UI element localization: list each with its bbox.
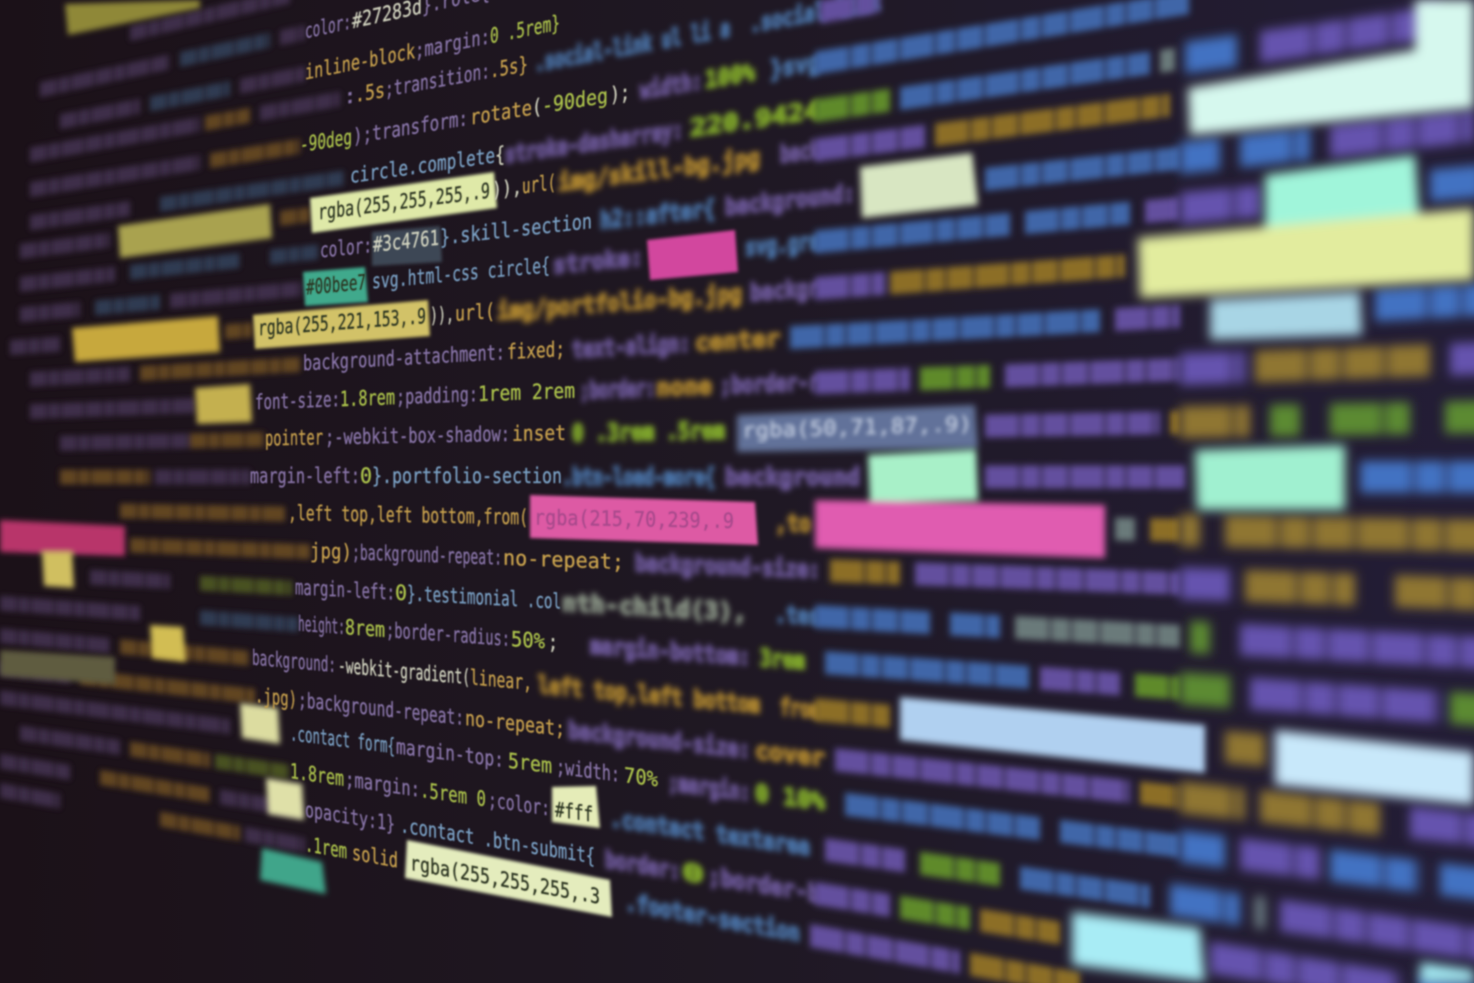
code line: color 27283d: color: <box>305 10 351 44</box>
code line: background repeat: ;background-repeat: <box>352 540 502 570</box>
code line: height and border radius: 50% <box>511 626 545 654</box>
code line: margin and colour: ;margin: <box>345 766 420 802</box>
highlight: yellow left <box>72 316 220 362</box>
highlight: cyan corner <box>1420 962 1474 983</box>
blurred text: load more: .btn-load-more{ <box>562 463 715 491</box>
blurred text: background size lower: background-size: <box>568 716 750 764</box>
blurred text: after selector <box>600 179 855 235</box>
highlight: top left yellow <box>65 0 200 35</box>
code line: transition <box>343 51 528 109</box>
code line: margin and colour: .5rem 0 <box>420 777 486 811</box>
code line: inline-block <box>305 10 560 85</box>
blurred text: width 100: 100% <box>705 58 755 94</box>
code line: testimonial <box>295 574 561 614</box>
blurred text: margin bottom: 3rem <box>760 644 805 675</box>
code line: solid rgba: solid <box>352 840 398 873</box>
highlight: mint right <box>1195 445 1345 510</box>
code line: background repeat lower <box>255 682 565 741</box>
code line: portfolio section: 0 <box>360 464 372 488</box>
highlight: teal lower <box>260 848 326 894</box>
highlight: blue white right <box>1275 730 1474 805</box>
code line: inline-block: inline-block <box>305 38 415 85</box>
code line: rgba white with url: )), <box>492 174 522 202</box>
code line: webkit gradient <box>252 645 532 695</box>
blurred text: width 100: width: <box>640 67 702 105</box>
blurred text: text align: text-align: <box>572 329 690 364</box>
code line: contact form: margin-top: <box>396 734 504 772</box>
code line: background repeat lower: no-repeat; <box>465 705 565 741</box>
far-right strongly defocused code lines <box>1170 21 1474 983</box>
highlight: white mint <box>1188 0 1474 135</box>
code line: contact button: .contact .btn-submit{ <box>400 812 595 869</box>
code line: transition: ;transition: <box>385 58 490 102</box>
blurred text: skill bg image: back <box>780 136 820 169</box>
code line: svg html css: svg.html-css circle{ <box>372 252 550 294</box>
code line: background repeat: no-repeat; <box>503 546 624 574</box>
blurred text: border: ;border-b <box>708 862 820 908</box>
blurred text: border none <box>580 368 820 405</box>
code line: contact form <box>290 720 658 792</box>
code line: testimonial: 0 <box>395 580 407 605</box>
highlight: pale blue <box>1210 292 1362 340</box>
highlight: magenta rgba <box>530 495 758 545</box>
code line: background repeat lower: .jpg) <box>255 682 297 712</box>
code line: circle complete: circle.complete <box>350 143 495 188</box>
code line: transform rotate: ( <box>532 93 542 120</box>
code line: margin and colour: #fff <box>555 797 593 827</box>
code line: contact form: .contact form{ <box>290 720 395 758</box>
code line: skill section: #3c4761 <box>373 225 439 257</box>
highlight: colour fff <box>552 786 600 828</box>
highlight: magenta wide <box>815 500 1105 558</box>
blurred text: nth child: nth-child(3), <box>562 589 747 627</box>
highlight: small gold <box>195 384 252 424</box>
highlight: mint centre <box>868 450 978 502</box>
code line: font size and padding: 1.8rem <box>340 385 395 411</box>
blurred text: text align: center <box>695 324 780 357</box>
highlight: rgba 255,255,255,.3 <box>405 840 612 917</box>
code line: transform rotate: rotate <box>470 95 532 130</box>
highlight: small pale b <box>266 778 304 820</box>
blurred text: border <box>605 845 820 908</box>
blurred text: stroke dasharray <box>505 96 820 169</box>
highlight: olive <box>118 204 272 258</box>
code line: font size and padding: ;padding: <box>396 382 478 409</box>
highlight: mint <box>1265 155 1420 235</box>
code line: rgba 255,221,153 with url: )), <box>430 301 454 328</box>
code line: skill section <box>320 208 592 263</box>
code line: contact form: ;width: <box>556 754 620 787</box>
highlight: pale green <box>860 153 978 218</box>
code line: box shadow: ;-webkit-box-shadow: <box>325 422 510 449</box>
blurred text: footer section: .footer-section <box>625 888 800 947</box>
code line: box shadow: inset <box>512 421 566 446</box>
code line: background attachment: background-attachment: <box>303 339 505 375</box>
blurred text: width 100 <box>640 48 820 105</box>
highlight: cyan <box>1072 912 1205 982</box>
highlight: large yellow <box>1138 208 1474 298</box>
code line: transform rotate: -90deg <box>300 124 352 157</box>
highlight: rgba 255,255,255 <box>310 172 497 233</box>
code line: transform rotate <box>300 79 630 157</box>
code line: webkit gradient: background: <box>252 645 336 677</box>
code line: webkit gradient: -webkit-gradient( <box>338 652 470 689</box>
code line: color 27283d <box>305 0 490 44</box>
highlight: small yellow b <box>150 625 186 662</box>
code line: box shadow: pointer <box>265 425 323 450</box>
code line: portfolio section: margin-left: <box>250 464 360 488</box>
code line: solid rgba: .1rem <box>305 831 347 864</box>
blurred text: portfolio image: img/portfolio-bg.jpg <box>497 279 742 325</box>
blurred text: nth child: .tes <box>775 600 820 631</box>
code line: svg html css <box>306 252 550 300</box>
code line: font size and padding: 1rem 2rem <box>478 379 575 406</box>
blurred text: left top: left top,left bottom <box>538 671 760 719</box>
code line: testimonial: margin-left: <box>295 574 395 605</box>
centre-right defocused code text <box>497 0 880 947</box>
highlight: small pale a <box>240 703 280 744</box>
highlight: steel blue <box>737 405 978 452</box>
blurred text: border: 0 <box>682 858 704 889</box>
highlight: colour 3c4761 <box>372 226 442 266</box>
blurred text: stroke: stroke: <box>553 243 643 279</box>
code line: rgba 255,221,153 with url: url( <box>455 298 495 326</box>
code line: height and border radius <box>298 611 558 654</box>
code line: height and border radius: 8rem <box>345 614 385 642</box>
blurred text: stroke dasharray: stroke-dasharray: <box>505 116 683 169</box>
code line: contact button: opacity:1} <box>305 797 395 836</box>
blurred text: background size: background-size: <box>635 549 820 584</box>
right defocused code lines <box>790 1 1190 983</box>
highlight: left pink <box>0 520 125 556</box>
code line: solid rgba: rgba(255,255,255,.3 <box>410 850 600 909</box>
far defocused highlight bars <box>1072 0 1474 983</box>
code line: rgba white with url: rgba(255,255,255,.9 <box>318 178 490 224</box>
blurred text: margin <box>668 768 825 816</box>
blurred text: margin: 0 10% <box>755 779 825 816</box>
blurred text: border: border: <box>605 845 680 885</box>
code line: skill section: }.skill-section <box>440 208 592 250</box>
highlight: magenta small <box>647 230 738 280</box>
highlight: left olive <box>0 650 115 684</box>
blurred text: contact textarea: .contact textarea <box>610 804 810 861</box>
code line: rgba 255,221,153 with url: rgba(255,221,153,.9 <box>258 303 426 340</box>
code line: portfolio section <box>250 464 562 488</box>
highlight: blue white <box>900 697 1205 773</box>
blurred text: nth child <box>562 589 820 631</box>
code line: background repeat: jpg) <box>310 539 352 564</box>
code line: contact form: 5rem <box>508 748 552 778</box>
blurred text: skill bg image: img/skill-bg.jpg <box>558 143 760 197</box>
blurred text: after selector: h2::after{ <box>600 194 715 235</box>
code line: contact button <box>305 797 595 869</box>
code line: portfolio section: }.portfolio-section <box>372 464 562 488</box>
highlight: rgba 255,221,153 <box>253 300 430 349</box>
code line: transition: .5s <box>355 77 385 107</box>
code line: circle complete: { <box>495 141 505 167</box>
blurred rgba label on steel bar: rgba(50,71,87,.9) <box>742 412 972 443</box>
blurred text: margin: ;margin: <box>668 768 750 806</box>
code line: height and border radius: ; <box>548 629 558 654</box>
code line: left top gradient: rgba(215,70,239,.9 <box>534 505 734 533</box>
blurred text: border none: none <box>656 372 712 402</box>
code line: height and border radius: ;border-radius: <box>386 617 510 651</box>
code line: svg html css: #00bee7 <box>306 269 366 300</box>
code line: margin and colour <box>290 758 593 827</box>
blurred text: load more: background <box>725 463 860 491</box>
code line: rgba white with url: url( <box>522 169 556 198</box>
code line: left top gradient: ,left top,left bottom,from( <box>288 501 528 529</box>
blurred text: border none: ;border-r <box>720 368 820 400</box>
blurred text: margin bottom: margin-bottom: <box>590 632 750 671</box>
code line: transition: : <box>343 82 357 109</box>
code line: contact form: 70% <box>624 762 658 792</box>
code line: margin and colour: 1.8rem <box>290 758 344 791</box>
mid-distance defocused highlight bars <box>737 153 1205 773</box>
code line: transform rotate: ); <box>610 79 630 107</box>
blurred text: stroke dasharray: 220.9424 <box>690 96 820 142</box>
code line: inline-block: ;margin: <box>415 24 490 63</box>
code line: font size and padding: font-size: <box>255 387 340 414</box>
left defocused highlight bars <box>0 0 326 894</box>
code line: testimonial: }.testimonial .col <box>407 580 561 614</box>
blurred text: stroke <box>553 227 820 279</box>
code line: font size and padding <box>255 379 575 414</box>
blurred text: to colour: ,to <box>775 509 811 538</box>
code line: transform rotate: -90deg <box>542 83 608 118</box>
readable code text in focus <box>250 0 734 909</box>
code line: height and border radius: height: <box>298 611 345 639</box>
blurred text: background size lower: cover <box>755 737 825 772</box>
blurred text: after selector: background: <box>725 179 855 221</box>
in-focus highlight bars <box>253 172 758 917</box>
code line: skill section: color: <box>320 232 372 263</box>
code line: background repeat lower: ;background-repeat: <box>298 687 464 730</box>
blurred text: left top: from <box>780 693 820 724</box>
code line: inline-block: 0 .5rem} <box>490 10 560 48</box>
code line: solid rgba <box>305 831 600 909</box>
blurred text: stroke: svg.gra <box>745 227 820 262</box>
code line: background attachment: fixed; <box>507 336 565 364</box>
code line: margin and colour: ;color: <box>488 787 550 821</box>
code line: webkit gradient: linear, <box>470 664 532 695</box>
blurred text: shadow values: 0 .3rem .5rem <box>572 417 725 447</box>
highlight: small yellow a <box>42 552 74 588</box>
code line: transform rotate: );transform: <box>353 105 468 149</box>
far-left dim code lines <box>0 0 345 845</box>
blurred text: width 100: }svg <box>770 48 820 84</box>
code line: transition: .5s} <box>490 51 528 83</box>
blurred text: portfolio image: backgr <box>750 274 820 307</box>
blurred text: border none: ;border: <box>580 374 655 405</box>
highlight: teal <box>303 267 368 306</box>
